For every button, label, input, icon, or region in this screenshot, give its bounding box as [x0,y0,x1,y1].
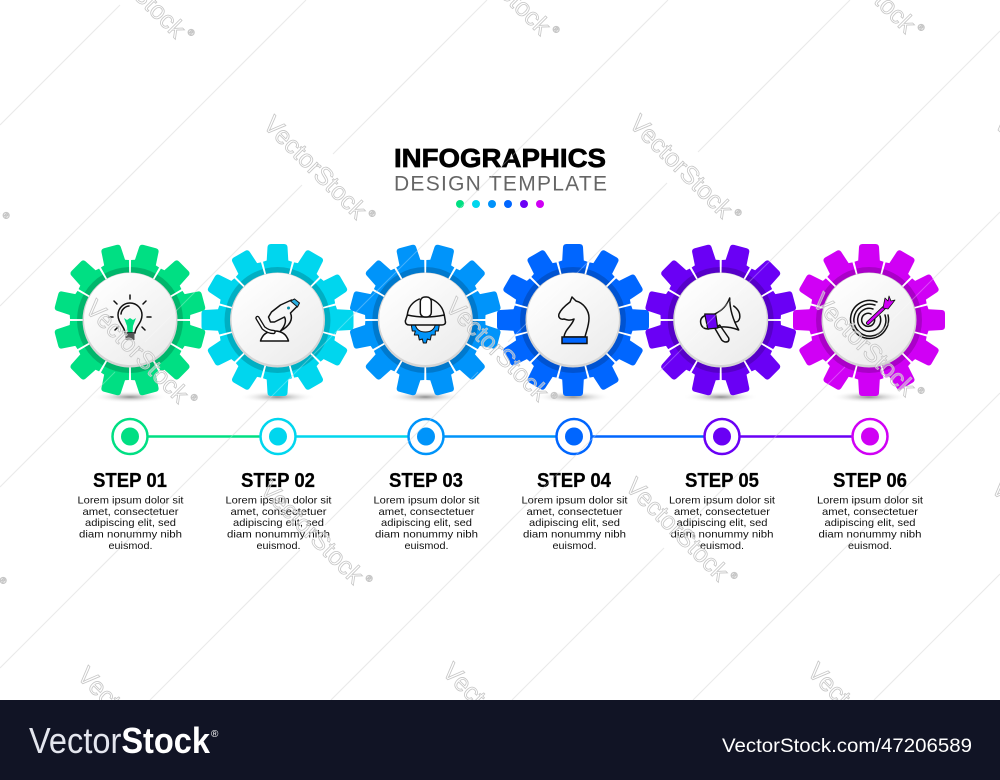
step 01 text: amet, consectetuer [82,506,179,518]
node 4 [556,419,592,454]
watermarks: VectorStock [620,472,734,587]
step 06 text: euismod. [848,540,892,552]
step 04 text: adipiscing elit, sed [529,517,620,529]
step 06 text: adipiscing elit, sed [824,517,916,529]
step 03 text: Lorem ipsum dolor sit [374,494,480,506]
step 03 text [374,470,480,552]
node 6 [852,419,888,454]
watermarks: ® [188,392,200,404]
step 01 text: STEP 01 [93,470,167,492]
step 01 text: adipiscing elit, sed [85,517,176,529]
watermarks: ® [366,208,378,220]
step 03 text: adipiscing elit, sed [381,517,472,529]
watermarks: ® [915,22,927,34]
gear 1: green with light bulb [37,227,223,413]
footer logo: VectorStock [29,720,211,761]
icon: hard hat with cog [405,297,445,343]
step 02 text: diam nonummy nibh [227,528,330,540]
step 05 text: diam nonummy nibh [670,528,774,540]
watermarks: VectorStock [807,287,921,402]
step 03 text: euismod. [404,540,448,552]
step 06 text: STEP 06 [833,470,907,492]
watermarks: VectorStock [802,657,916,772]
icon: microscope [258,299,300,341]
watermarks: ® [728,570,740,582]
step 03 text: amet, consectetuer [378,506,475,518]
gear 6: magenta with target [793,244,945,403]
step 06 text: amet, consectetuer [822,506,919,518]
watermarks: VectorStock [440,292,554,407]
step 05 text: Lorem ipsum dolor sit [669,494,775,506]
footer url: VectorStock.com/47206589 [722,736,972,757]
watermarks: VectorStock [72,661,186,776]
step 05 text: amet, consectetuer [674,506,771,518]
watermarks: VectorStock [437,657,551,772]
watermarks: ® [550,24,562,36]
node 3 [408,419,444,454]
step 02 text: STEP 02 [241,470,315,492]
step 06 text: diam nonummy nibh [818,528,922,540]
step 05 text: STEP 05 [685,470,759,492]
step 04 text: Lorem ipsum dolor sit [522,494,628,506]
heading: infographics: INFOGRAPHICS [394,143,606,173]
watermarks: VectorStock [255,475,369,590]
step 06 text: Lorem ipsum dolor sit [817,494,923,506]
node 2 [260,419,296,454]
step 05 text [669,470,775,552]
watermarks: VectorStock [258,110,372,225]
step 03 text: STEP 03 [389,470,463,492]
footer bar [0,700,1000,780]
registered mark: ® [211,729,219,740]
timeline [112,419,888,454]
step 01 text: Lorem ipsum dolor sit [78,494,184,506]
step 02 text [226,470,332,552]
step 04 text: STEP 04 [537,470,612,492]
step 05 text: euismod. [700,540,744,552]
step 02 text: Lorem ipsum dolor sit [226,494,332,506]
step 03 text: diam nonummy nibh [375,528,478,540]
icon: megaphone [701,298,740,342]
icon: light bulb [109,295,151,340]
node 5 [704,419,740,454]
watermarks: ® [915,385,927,397]
gear 2: cyan with microscope [202,244,354,403]
watermarks: VectorStock [624,109,738,224]
watermarks: ® [0,210,12,222]
step 01 text: euismod. [108,540,152,552]
icon: target and arrow [851,296,895,338]
watermarks: ® [732,207,744,219]
step 02 text: euismod. [256,540,300,552]
step 04 text: amet, consectetuer [526,506,623,518]
step 04 text: diam nonummy nibh [523,528,626,540]
step 02 text: amet, consectetuer [230,506,327,518]
node 1 [112,419,148,454]
colour dots row [456,200,544,208]
watermarks: ® [185,27,197,39]
icon: chess knight [559,297,589,344]
watermarks: VectorStock [80,294,194,409]
gear 4: royal blue with chess knight [497,244,649,403]
step 06 text [817,470,923,552]
watermarks: ® [548,390,560,402]
gear 3: blue with helmet and cog [332,227,518,413]
step 02 text: adipiscing elit, sed [233,517,324,529]
watermarks: ® [363,573,375,585]
subheading: design template: DESIGN TEMPLATE [394,172,607,196]
step 01 text [78,470,184,552]
step 01 text: diam nonummy nibh [79,528,182,540]
step 05 text: adipiscing elit, sed [676,517,768,529]
title block [394,143,607,208]
gear 5: violet with megaphone [628,227,814,413]
step 04 text [522,470,628,552]
step 04 text: euismod. [552,540,596,552]
